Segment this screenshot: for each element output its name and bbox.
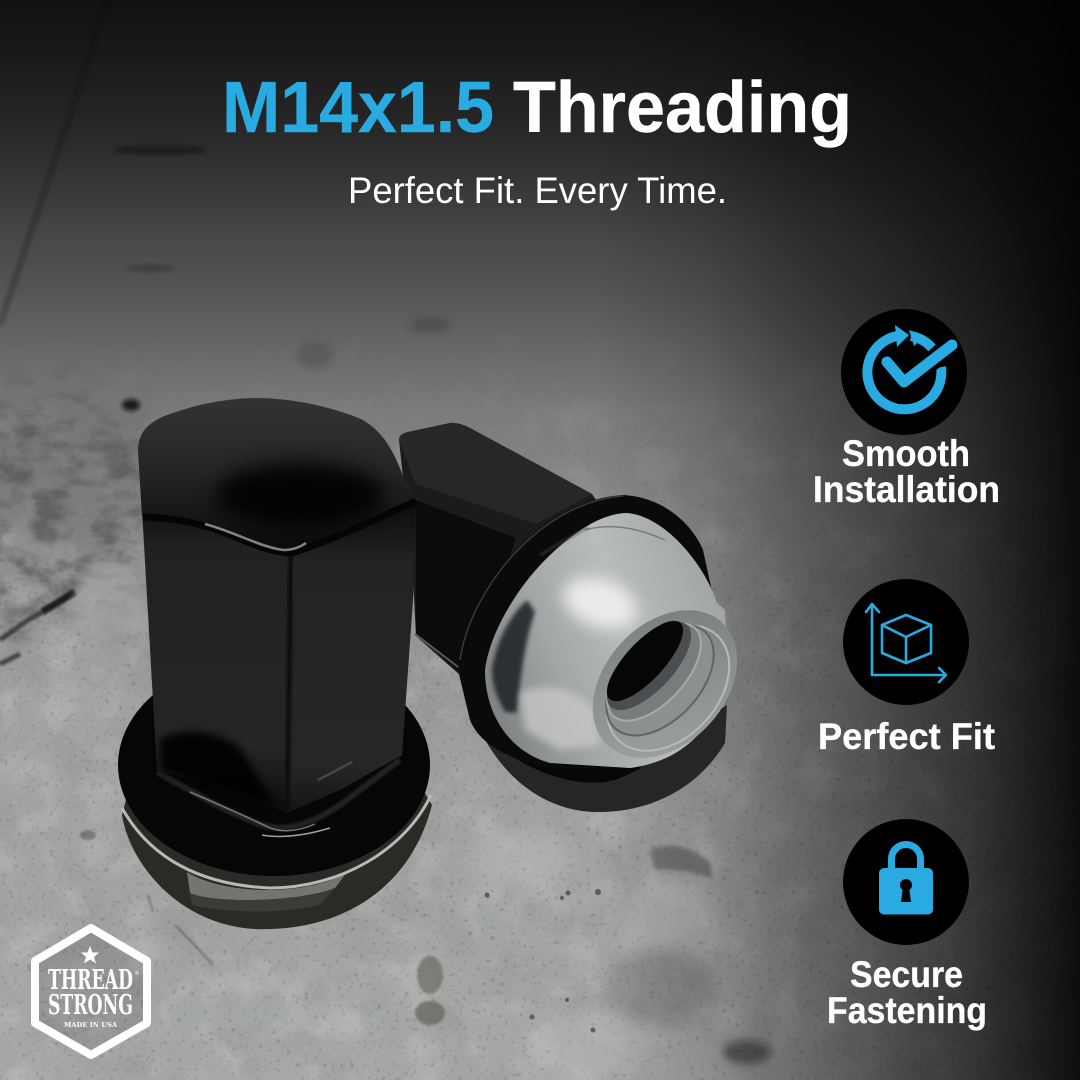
icon: cube on axes xyxy=(843,579,969,705)
label: perfect fit: Perfect Fit xyxy=(818,716,995,757)
shadow and washer under left nut xyxy=(122,785,432,929)
right nut hex body xyxy=(399,423,610,684)
label: smooth installation: Smooth xyxy=(842,433,970,474)
label: secure fastening xyxy=(827,954,987,1031)
label: smooth installation: Installation xyxy=(813,469,1000,510)
feature: smooth installation xyxy=(813,309,1000,510)
feature: secure fastening xyxy=(827,819,987,1031)
logo: thread strong badge: ® xyxy=(135,970,139,977)
title: M14x1.5 xyxy=(222,68,494,148)
logo: thread strong badge xyxy=(35,928,147,1055)
logo: thread strong badge: STRONG xyxy=(48,990,133,1021)
logo: thread strong badge: THREAD xyxy=(48,965,133,996)
icon: rotating check mark xyxy=(841,309,967,435)
title: Threading xyxy=(513,68,852,148)
label: secure fastening: Fastening xyxy=(827,990,987,1031)
right nut silver dome xyxy=(485,513,728,768)
right nut threaded opening xyxy=(564,582,766,786)
title xyxy=(222,68,852,148)
left nut hex faces xyxy=(142,510,291,813)
right nut flange ring xyxy=(458,495,716,768)
subtitle: Perfect Fit. Every Time. xyxy=(348,170,727,211)
right lug nut, lying on its side xyxy=(399,423,766,812)
icon: padlock xyxy=(843,819,969,945)
label: secure fastening: Secure xyxy=(850,954,963,995)
left nut domed cap xyxy=(138,398,416,552)
left nut flange xyxy=(118,654,430,876)
shadow under right nut xyxy=(468,700,727,812)
logo: thread strong badge: MADE IN USA xyxy=(64,1021,118,1029)
label: smooth installation xyxy=(813,433,1000,510)
feature: perfect fit xyxy=(818,579,995,757)
left lug nut, standing upright xyxy=(118,398,432,929)
